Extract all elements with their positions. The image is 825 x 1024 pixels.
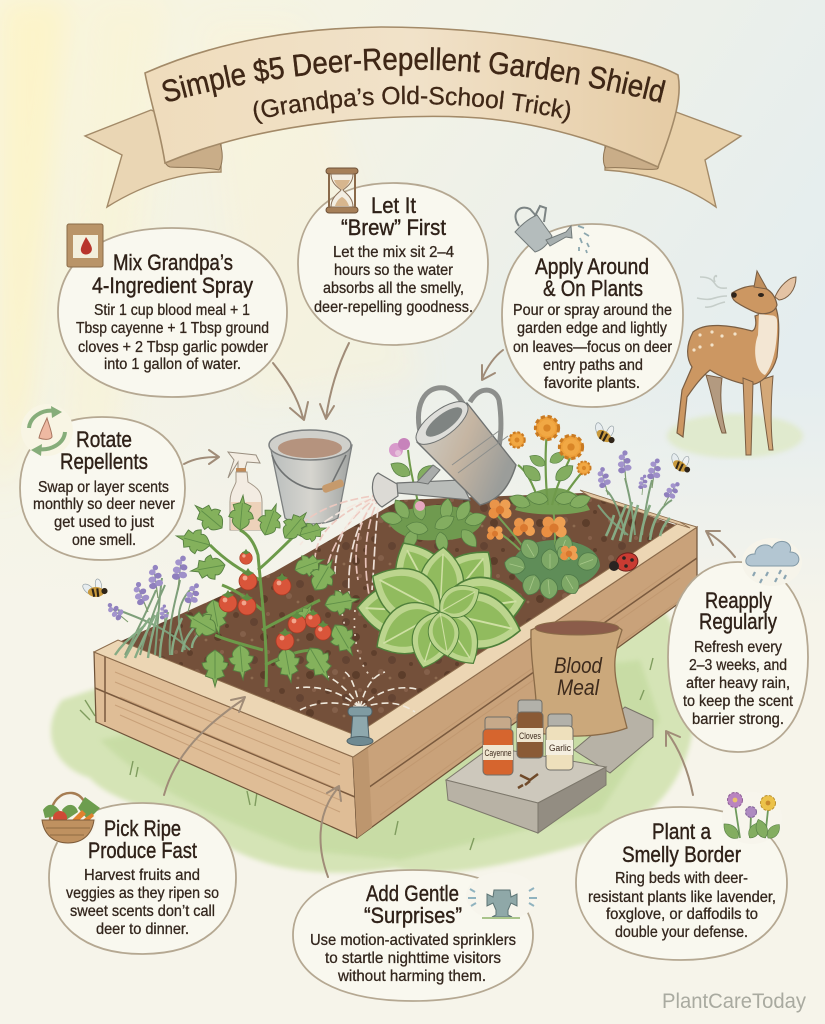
panel: let it brew — [298, 168, 488, 345]
heading: rotate: Repellents — [60, 449, 148, 474]
deer head — [732, 286, 777, 314]
arrow: brew to bucket — [320, 343, 349, 419]
body: apply: favorite plants. — [544, 375, 640, 392]
banner title — [84, 26, 742, 208]
stones — [446, 707, 653, 833]
heading: border: Plant a — [652, 819, 712, 844]
body: apply: garden edge and lightly — [517, 320, 667, 337]
heading: pick — [88, 816, 197, 863]
title line 2: (Grandpa’s Old-School Trick) — [254, 86, 570, 124]
body: apply: entry paths and — [543, 357, 643, 374]
body: border: Ring beds with deer- — [615, 870, 748, 887]
bucket — [269, 430, 352, 524]
banner left tail — [85, 110, 221, 207]
body: rotate: get used to just — [54, 514, 155, 531]
right lavender — [595, 450, 682, 542]
can body — [417, 403, 516, 505]
heading: mix — [92, 250, 253, 298]
sprinkler in bed — [296, 672, 420, 746]
heading: brew: “Brew” First — [341, 215, 446, 240]
icon: rain cloud — [742, 538, 802, 586]
jar: cayenne: Cayenne — [484, 748, 512, 758]
body: brew: absorbs all the smelly, — [323, 280, 464, 297]
heading: surprises — [364, 881, 462, 928]
icon: hourglass — [326, 168, 358, 213]
blood meal sack: Meal — [557, 675, 600, 700]
watering can — [372, 388, 516, 507]
arrow: rotate to bottle — [184, 450, 219, 464]
body: surprises: to startle nighttime visitors — [325, 950, 501, 967]
icon: border flowers — [720, 792, 783, 844]
bed right face — [353, 527, 697, 838]
banner right tail — [605, 112, 741, 207]
grass under the bed — [51, 610, 694, 873]
panel: gentle surprises — [293, 870, 538, 1001]
heading: reapply — [699, 588, 777, 634]
spice jars — [483, 700, 573, 788]
left lavender — [104, 555, 202, 658]
body: brew: deer-repelling goodness. — [314, 299, 473, 316]
panel: mix spray — [58, 224, 287, 397]
sack label: Blood — [554, 653, 603, 678]
heading: brew — [341, 193, 446, 240]
heading: pick: Produce Fast — [88, 838, 197, 863]
body: reapply: 2–3 weeks, and — [689, 657, 787, 674]
panel: rotate repellents — [20, 404, 185, 560]
body: rotate: monthly so deer never — [33, 496, 176, 513]
blood meal sack — [531, 621, 627, 736]
ladybug — [609, 550, 640, 574]
panel: reapply — [668, 538, 808, 752]
body: reapply: to keep the scent — [683, 693, 794, 710]
orange flower plant — [487, 500, 601, 600]
body: pick: Harvest fruits and — [84, 867, 200, 884]
left bee — [80, 575, 109, 604]
body: border: resistant plants like lavender, — [588, 889, 776, 906]
watermark: PlantCareToday — [662, 990, 806, 1013]
title line 1: Simple $5 Deer-Repellent Garden Shield — [162, 47, 666, 103]
heading: surprises: Add Gentle — [366, 881, 459, 906]
body: mix: Tbsp cayenne + 1 Tbsp ground — [76, 320, 269, 337]
raised garden bed — [94, 490, 697, 838]
hosta plant — [356, 531, 529, 675]
body: brew: Let the mix sit 2–4 — [333, 244, 454, 261]
icon: nose with rotating arrows — [21, 404, 73, 456]
arrow: apply to can — [482, 350, 503, 380]
body: surprises — [310, 932, 516, 985]
bed corner post — [353, 747, 372, 838]
heading: border — [622, 819, 741, 867]
body: rotate: Swap or layer scents — [38, 479, 169, 496]
body: mix: Stir 1 cup blood meal + 1 — [94, 302, 250, 319]
body: mix — [76, 302, 269, 373]
arrow: reapply to bed — [706, 531, 735, 557]
jar: cloves: Cloves — [519, 731, 541, 741]
heading: pick: Pick Ripe — [104, 816, 181, 841]
body: apply — [513, 302, 673, 392]
body: reapply — [683, 639, 794, 728]
arrow: mix to bucket — [273, 363, 308, 420]
body: reapply: after heavy rain, — [686, 675, 790, 692]
heading: apply: & On Plants — [543, 276, 643, 301]
bed top rim — [94, 522, 697, 757]
heading: border: Smelly Border — [622, 842, 741, 867]
icon: blood meal packet — [67, 224, 103, 267]
heading: brew: Let It — [371, 193, 416, 218]
body: brew — [314, 244, 473, 316]
panel: smelly border — [576, 792, 787, 960]
heading: apply: Apply Around — [535, 254, 649, 279]
spray of water — [295, 495, 380, 680]
body: pick: deer to dinner. — [96, 921, 189, 938]
arrow: border to sack — [666, 731, 693, 795]
can handles — [419, 388, 501, 455]
jar: garlic: Garlic — [549, 743, 571, 753]
body: apply: Pour or spray around the — [513, 302, 672, 319]
bed soil — [110, 493, 690, 745]
banner left fold — [165, 143, 222, 170]
heading: reapply: Reapply — [705, 588, 772, 613]
body: apply: on leaves—focus on deer — [513, 339, 673, 356]
pink flower plant — [379, 438, 488, 555]
bees near flowers — [591, 421, 692, 475]
body: rotate — [33, 479, 176, 549]
heading: reapply: Regularly — [699, 609, 777, 634]
body: border: double your defense. — [615, 924, 748, 941]
spray bottle — [228, 452, 262, 530]
banner body — [145, 27, 679, 167]
body: pick: sweet scents don’t call — [70, 903, 215, 920]
body: surprises: without harming them. — [337, 968, 486, 985]
bed left face — [94, 652, 357, 838]
body: rotate: one smell. — [72, 532, 136, 549]
body: brew: hours so the water — [334, 262, 454, 279]
banner right fold — [603, 146, 659, 169]
heading: rotate: Rotate — [76, 427, 132, 452]
heading: surprises: “Surprises” — [364, 903, 462, 928]
icon: small watering can — [515, 206, 589, 253]
heading: apply — [535, 254, 649, 301]
body: border: foxglove, or daffodils to — [606, 906, 758, 923]
marigold plant — [507, 416, 593, 514]
body: mix: into 1 gallon of water. — [104, 356, 241, 373]
body: reapply: Refresh every — [694, 639, 782, 656]
can spout — [397, 480, 470, 500]
arrow: pick to tomato — [164, 697, 245, 795]
panel: apply around — [502, 206, 683, 407]
icon: sprinkler — [466, 872, 538, 920]
body: mix: cloves + 2 Tbsp garlic powder — [78, 339, 269, 356]
scent wisps — [697, 276, 727, 307]
deer — [667, 271, 803, 458]
body: pick — [66, 867, 219, 938]
arrows — [164, 343, 735, 877]
arrow: surprises to sprinkler — [320, 786, 341, 877]
heading: mix: 4-Ingredient Spray — [92, 273, 253, 298]
heading: rotate — [60, 427, 148, 474]
body: pick: veggies as they ripen so — [66, 885, 219, 902]
tomato plant — [173, 494, 363, 687]
body: reapply: barrier strong. — [692, 711, 784, 728]
panel: pick ripe produce — [40, 793, 236, 954]
heading: mix: Mix Grandpa’s — [113, 250, 233, 275]
body: surprises: Use motion-activated sprinklers — [310, 932, 516, 949]
icon: harvest basket — [40, 793, 100, 844]
body: border — [588, 870, 776, 941]
